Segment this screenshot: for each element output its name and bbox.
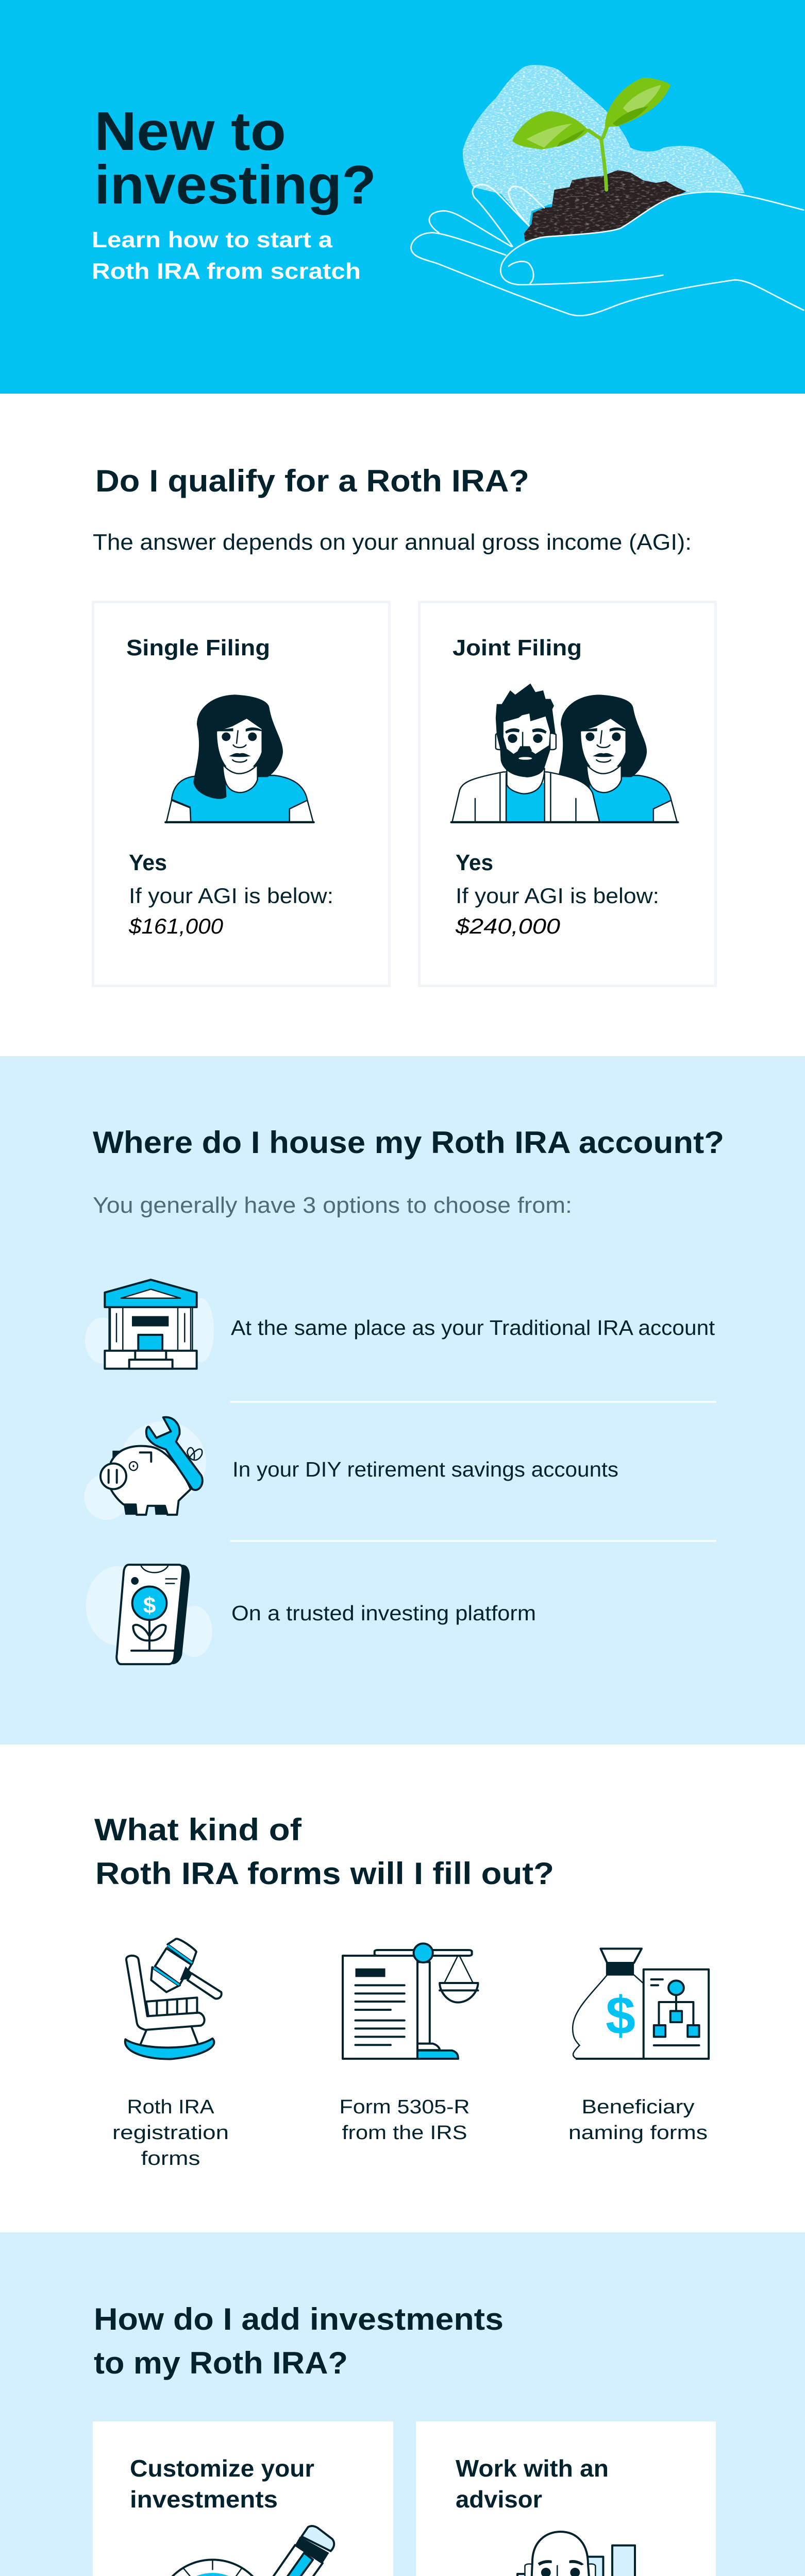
hero subtitle: Roth IRA from scratch (92, 259, 361, 284)
joint filing answer: Yes (456, 850, 493, 875)
hero title (94, 101, 376, 215)
intro text: house: You generally have 3 options to choose from: (93, 1193, 572, 1218)
section: forms (94, 1812, 709, 2170)
seedling (512, 78, 670, 190)
panel: joint filing (420, 602, 715, 986)
icon: couple (451, 684, 678, 822)
heading: house: Where do I house my Roth IRA account? (93, 1125, 724, 1160)
icon: woman (165, 694, 314, 822)
hero title: New to (94, 101, 286, 162)
panel: customize investments (93, 2421, 393, 2576)
joint filing answer (455, 850, 659, 938)
label: form 5305-R (339, 2096, 470, 2144)
label: form 5305-R: from the IRS (342, 2122, 467, 2144)
heading: qualify: Do I qualify for a Roth IRA? (95, 464, 529, 498)
card heading: customize: Customize your (130, 2455, 314, 2482)
icon: advisor (473, 2532, 648, 2576)
label: registration forms: registration (112, 2122, 229, 2144)
icon: coin and pencil (156, 2526, 334, 2576)
icon: money bag and beneficiary chart: $ (606, 1986, 635, 2046)
option 2 text: In your DIY retirement savings accounts (232, 1458, 618, 1481)
hero banner (0, 0, 805, 394)
panel: work with advisor (416, 2421, 716, 2576)
heading: investments (94, 2302, 504, 2380)
label: registration forms (112, 2096, 229, 2170)
card heading: advisor: Work with an (456, 2455, 609, 2482)
section: do I qualify (93, 464, 715, 986)
heading: investments: to my Roth IRA? (94, 2346, 348, 2380)
joint filing answer: If your AGI is below: (456, 884, 659, 908)
icon: money bag and beneficiary chart (573, 1948, 709, 2059)
heading: forms: Roth IRA forms will I fill out? (95, 1856, 554, 1891)
icon: hand holding a seedling in soil (411, 65, 803, 316)
hand outline (411, 184, 803, 316)
label: form 5305-R: Form 5305-R (339, 2096, 470, 2118)
card heading: advisor: advisor (456, 2486, 542, 2513)
single filing answer: If your AGI is below: (129, 884, 333, 908)
heading: investments: How do I add investments (94, 2302, 504, 2336)
icon: phone with money plant: $ (143, 1593, 156, 1618)
label: beneficiary forms (568, 2096, 708, 2144)
icon: bank (85, 1280, 214, 1369)
card heading: advisor (456, 2455, 609, 2513)
panel: joint filing: Joint Filing (452, 635, 582, 660)
panel: single filing: Single Filing (126, 635, 270, 660)
label: registration forms: Roth IRA (127, 2096, 214, 2118)
hero title: investing? (94, 155, 376, 215)
section: add investments (0, 2232, 805, 2576)
icon: piggy bank with wrench (84, 1417, 206, 1520)
option 1 text: At the same place as your Traditional IRA account (231, 1316, 715, 1340)
soil (524, 170, 686, 241)
icon: rocking chair and gavel (125, 1939, 222, 2059)
label: beneficiary forms: naming forms (568, 2122, 708, 2144)
icon: phone with money plant (86, 1565, 212, 1664)
option 3 text: On a trusted investing platform (231, 1601, 536, 1625)
joint filing answer: $240,000 (455, 914, 561, 938)
section: where to house (0, 1056, 805, 1744)
card heading: customize: investments (130, 2486, 278, 2513)
intro text: qualify: The answer depends on your annual gross income (AGI): (93, 530, 692, 555)
label: beneficiary forms: Beneficiary (581, 2096, 695, 2118)
heading: forms (94, 1812, 554, 1891)
single filing answer: $161,000 (128, 914, 224, 938)
card heading: customize (130, 2455, 314, 2513)
panel: single filing (93, 602, 390, 986)
label: registration forms: forms (141, 2148, 200, 2170)
heading: forms: What kind of (94, 1812, 302, 1847)
single filing answer (128, 850, 333, 938)
hero subtitle (92, 227, 361, 284)
single filing answer: Yes (129, 850, 167, 875)
icon: form and scales (343, 1943, 478, 2059)
hero subtitle: Learn how to start a (92, 227, 333, 252)
